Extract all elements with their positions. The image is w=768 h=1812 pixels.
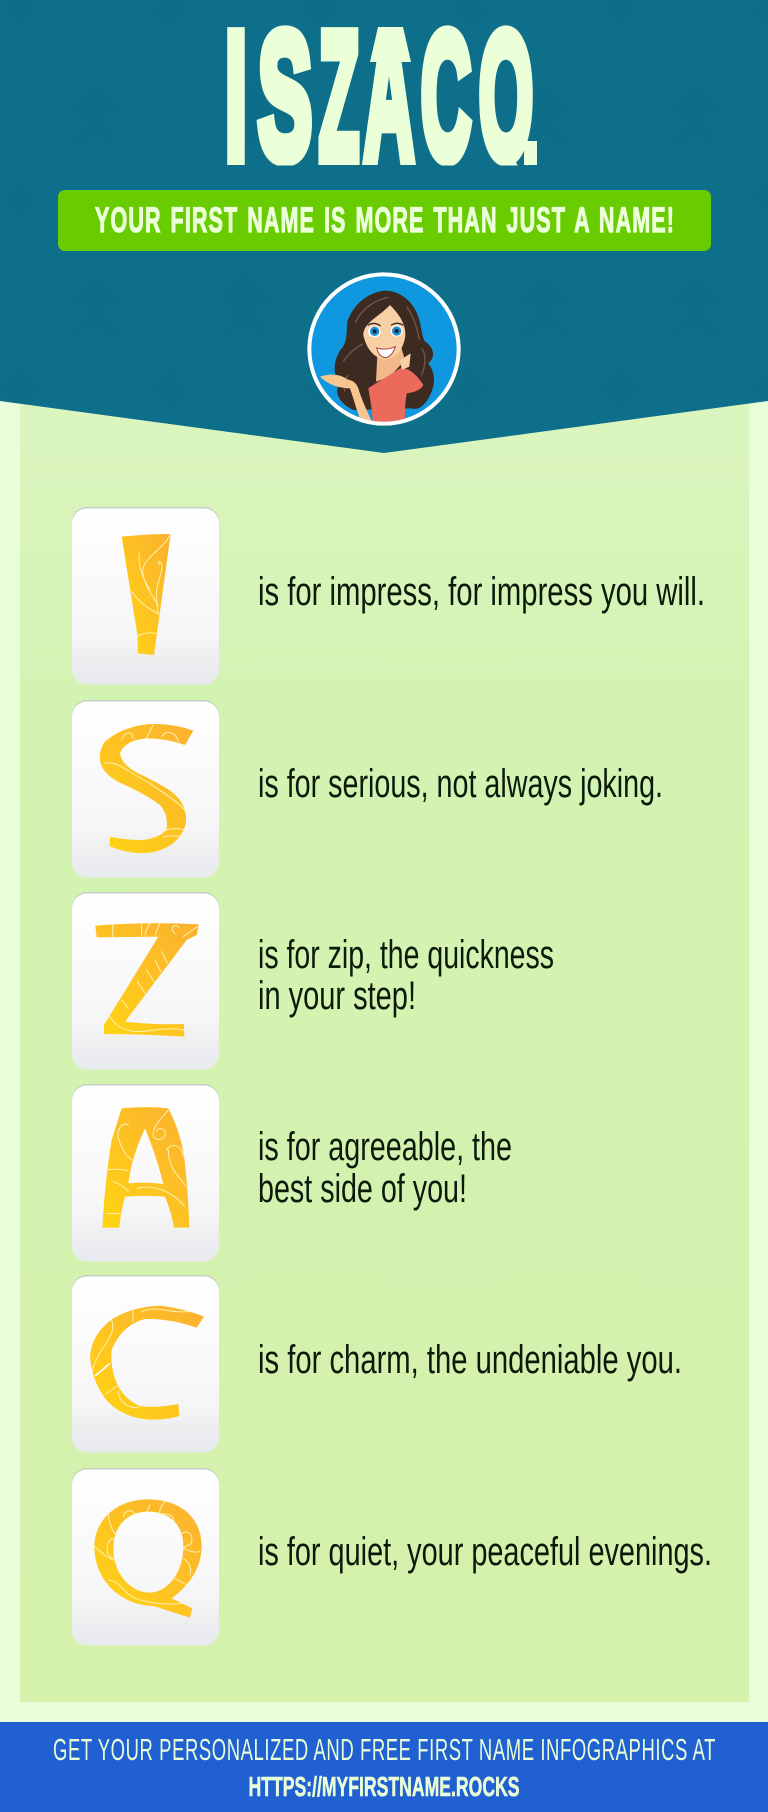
- header banner: Q: [479, 0, 533, 197]
- panel: letters background: [20, 380, 749, 1702]
- subtitle bar: [58, 190, 711, 251]
- card C: [72, 1275, 219, 1452]
- text Z: is for zip, the quickness: [258, 933, 554, 977]
- card I: [72, 507, 219, 684]
- letter S: [100, 724, 193, 853]
- row S: [72, 700, 663, 878]
- letter C: [90, 1306, 204, 1420]
- row C: [72, 1275, 682, 1452]
- text A: is for agreeable, the: [258, 1125, 512, 1169]
- row Z: [72, 892, 554, 1070]
- title: [227, 25, 537, 166]
- letter I: [122, 534, 171, 655]
- card Q: [72, 1468, 219, 1646]
- title: A: [364, 0, 414, 197]
- row I: [72, 507, 705, 684]
- title: S: [258, 0, 312, 197]
- letter Q: [94, 1499, 202, 1618]
- text Z: [258, 933, 554, 1018]
- icon: woman avatar: [307, 272, 461, 426]
- card S: [72, 700, 219, 878]
- text A: [258, 1125, 512, 1211]
- row Q: [72, 1468, 712, 1646]
- title: I: [225, 0, 247, 197]
- letter Z: [95, 923, 199, 1037]
- footer band: [0, 1722, 768, 1812]
- header banner: [0, 0, 768, 453]
- footer url: HTTPS://MYFIRSTNAME.ROCKS: [248, 1771, 520, 1802]
- title: C: [421, 0, 471, 197]
- title: Z: [319, 0, 359, 197]
- card Z: [72, 892, 219, 1070]
- letter A: [102, 1107, 189, 1228]
- card A: [72, 1084, 219, 1262]
- panel: letter rows: [72, 507, 712, 1646]
- text A: best side of you!: [258, 1167, 467, 1211]
- row A: [72, 1084, 512, 1262]
- text Z: in your step!: [258, 974, 416, 1018]
